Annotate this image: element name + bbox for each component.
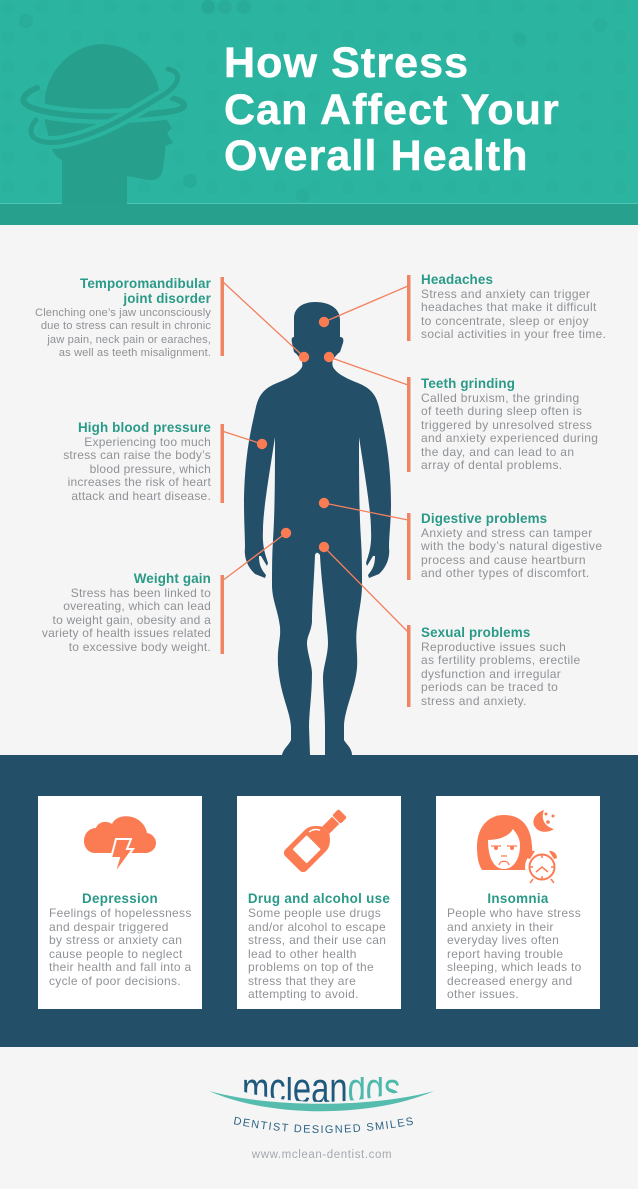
panel: drug and alcohol use: Drug and alcohol use — [248, 891, 390, 906]
panel: depression: Feelings of hopelessness — [49, 906, 192, 920]
text: teeth grinding: the day, and can lead to an — [421, 445, 574, 459]
panel: depression — [38, 796, 202, 1009]
text: weight gain: to excessive body weight. — [69, 640, 211, 654]
text: weight gain: Weight gain — [134, 571, 211, 586]
text: temporomandibular — [35, 276, 211, 359]
text: weight gain: variety of health issues related — [42, 626, 211, 640]
text: high blood pressure: Experiencing too much — [84, 435, 211, 449]
text: teeth grinding: and anxiety experienced during — [421, 431, 598, 445]
panel: depression: by stress or anxiety can — [49, 933, 182, 947]
text: headaches: Headaches — [421, 272, 493, 287]
marker dots — [257, 317, 334, 552]
text: teeth grinding: triggered by unresolved stress — [421, 418, 592, 432]
body diagram — [220, 275, 410, 755]
panel: depression: and despair triggered — [49, 920, 169, 934]
panel: insomnia: and anxiety in their — [447, 920, 554, 934]
text: sexual problems — [421, 625, 581, 708]
title: Overall Health — [224, 132, 529, 180]
panel: insomnia: Insomnia — [487, 891, 549, 906]
text: temporomandibular: due to stress can result in chronic — [41, 320, 211, 332]
text: teeth grinding — [421, 376, 598, 472]
text: headaches: to concentrate, sleep or enjoy — [421, 314, 589, 328]
title — [224, 39, 560, 180]
text: sexual problems: stress and anxiety. — [421, 694, 527, 708]
panel: depression: cycle of poor decisions. — [49, 974, 181, 988]
logo — [209, 1077, 434, 1161]
panel: drug and alcohol use — [237, 796, 401, 1009]
icon: bottle — [284, 810, 346, 872]
text: teeth grinding: of teeth during sleep often is — [421, 404, 582, 418]
text: digestive problems: Digestive problems — [421, 511, 547, 526]
icon: spinning head — [20, 44, 187, 204]
text: sexual problems: periods can be traced to — [421, 680, 558, 694]
text: sexual problems: dysfunction and irregular — [421, 667, 561, 681]
text: temporomandibular: jaw pain, neck pain or earaches, — [47, 334, 211, 346]
text: temporomandibular: as well as teeth misalignment. — [59, 347, 211, 359]
text: sexual problems: Sexual problems — [421, 625, 530, 640]
title: How Stress — [224, 39, 469, 87]
text: weight gain — [42, 571, 211, 654]
text: weight gain: Stress has been linked to — [71, 586, 211, 600]
panel: insomnia: report having trouble — [447, 946, 563, 960]
text: temporomandibular: Temporomandibular — [80, 276, 211, 291]
text: digestive problems: and other types of discomfort. — [421, 566, 590, 580]
panel: drug and alcohol use: problems on top of the — [248, 960, 374, 974]
panel: drug and alcohol use: stress that they are — [248, 974, 356, 988]
website: www.mclean-dentist.com — [251, 1149, 392, 1161]
text: digestive problems: with the body’s natural digestive — [421, 539, 602, 553]
panel: insomnia: People who have stress — [447, 906, 581, 920]
text: teeth grinding: Teeth grinding — [421, 376, 515, 391]
icon: tired face, moon and clock — [477, 810, 557, 884]
connector lines — [222, 281, 408, 632]
panel: insomnia: other issues. — [447, 987, 519, 1001]
text: temporomandibular: joint disorder — [123, 291, 211, 306]
text: sexual problems: Reproductive issues such — [421, 640, 566, 654]
text: digestive problems — [421, 511, 602, 580]
text: weight gain: overeating, which can lead — [63, 599, 211, 613]
panel: depression: their health and fall into a — [49, 960, 192, 974]
text: teeth grinding: Called bruxism, the grinding — [421, 391, 580, 405]
text: digestive problems: Anxiety and stress can tamper — [421, 526, 593, 540]
text: digestive problems: process and cause heartburn — [421, 553, 586, 567]
panel: insomnia: everyday lives often — [447, 933, 559, 947]
text: high blood pressure — [63, 420, 211, 503]
text: high blood pressure: blood pressure, which — [90, 462, 211, 476]
panel: insomnia — [436, 796, 600, 1009]
text: teeth grinding: array of dental problems. — [421, 458, 562, 472]
text: headaches — [421, 272, 606, 341]
text: sexual problems: as fertility problems, erectile — [421, 653, 581, 667]
title: Can Affect Your — [224, 86, 560, 134]
logo: mcleandds — [242, 1065, 400, 1113]
text: headaches: social activities in your free time. — [421, 327, 606, 341]
panel: insomnia: decreased energy and — [447, 974, 572, 988]
panel: insomnia: sleeping, which leads to — [447, 960, 582, 974]
panel: lower band — [0, 755, 638, 1047]
text: weight gain: to weight gain, obesity and a — [53, 613, 211, 627]
panel: drug and alcohol use: Some people use drugs — [248, 906, 381, 920]
panel: drug and alcohol use: and/or alcohol to escape — [248, 920, 386, 934]
panel: drug and alcohol use: attempting to avoid. — [248, 987, 359, 1001]
body silhouette — [244, 302, 391, 755]
text: high blood pressure: stress can raise the body’s — [63, 448, 211, 462]
panel: drug and alcohol use: lead to other health — [248, 946, 357, 960]
icon: storm cloud — [84, 816, 156, 870]
text: high blood pressure: increases the risk of heart — [68, 475, 211, 489]
text: high blood pressure: attack and heart disease. — [71, 489, 211, 503]
panel: depression: cause people to neglect — [49, 946, 183, 960]
panel: drug and alcohol use: stress, and their use can — [248, 933, 386, 947]
label bars — [220, 275, 410, 707]
header banner — [0, 0, 638, 225]
text: headaches: headaches that make it difficult — [421, 300, 597, 314]
text: headaches: Stress and anxiety can trigger — [421, 287, 590, 301]
text: high blood pressure: High blood pressure — [78, 420, 211, 435]
panel: depression: Depression — [82, 891, 158, 906]
text: temporomandibular: Clenching one’s jaw unconsciously — [35, 307, 211, 319]
logo: DENTIST DESIGNED SMILES — [234, 1116, 413, 1133]
